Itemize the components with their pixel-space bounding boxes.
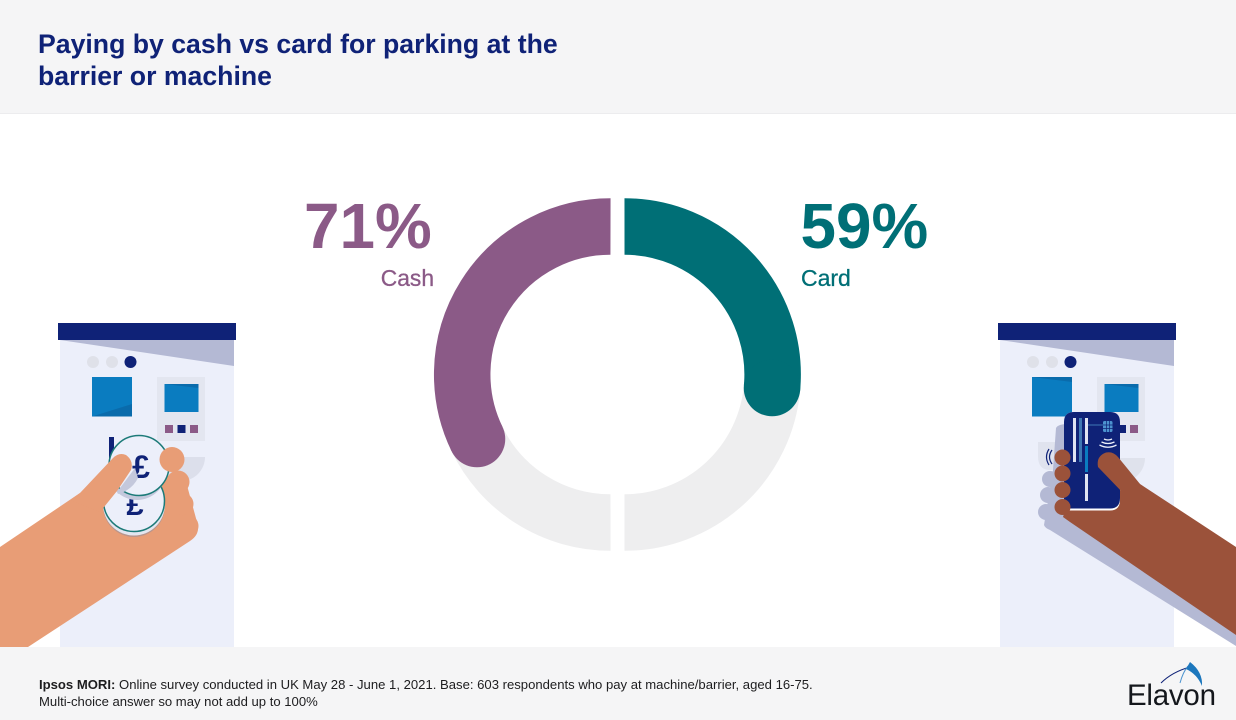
illustration: cash machine xyxy=(0,323,236,647)
label: cash: Cash xyxy=(381,265,434,291)
donut chart xyxy=(449,226,800,523)
chip xyxy=(1103,421,1112,432)
thumb xyxy=(70,454,132,512)
footnote xyxy=(39,677,813,709)
keypad panel xyxy=(1097,377,1145,441)
fingers xyxy=(1054,450,1070,515)
footnote: Multi-choice answer so may not add up to 100% xyxy=(39,694,318,709)
logo: Elavon xyxy=(1127,662,1216,712)
fingers xyxy=(160,447,198,538)
card reader slot xyxy=(1038,442,1145,482)
indicator lights xyxy=(1027,356,1076,368)
track: cash remainder xyxy=(477,439,610,523)
track: card remainder xyxy=(624,388,772,522)
arc: cash 71% xyxy=(449,226,610,467)
header band xyxy=(0,0,1236,114)
coin: upper pound: £ xyxy=(132,449,150,485)
footnote: Ipsos MORI: Online survey conducted in UK May 28 - June 1, 2021. Base: 603 respondents who pay at machine/barrier, aged 16-75. xyxy=(39,677,813,692)
label: card: Card xyxy=(801,265,851,291)
keypad panel xyxy=(157,377,205,441)
contactless symbol xyxy=(1100,439,1116,447)
footer band xyxy=(0,647,1236,720)
hand shadow xyxy=(1038,424,1236,646)
machine roof shadow xyxy=(60,340,234,366)
illustration: card machine xyxy=(998,323,1236,647)
hand palm xyxy=(1063,482,1236,635)
machine top bar xyxy=(58,323,236,340)
logo wordmark: Elavon xyxy=(1127,679,1216,712)
contactless waves xyxy=(1046,449,1052,465)
blue screen xyxy=(1032,377,1072,416)
stat: card 59%: 59% xyxy=(800,190,928,262)
thumb shadow xyxy=(117,468,138,494)
payment card xyxy=(1064,412,1120,510)
logo swoosh xyxy=(1161,662,1202,686)
machine body xyxy=(60,340,234,647)
coin slot xyxy=(109,437,205,481)
blue screen xyxy=(92,377,132,416)
stat: cash 71%: 71% xyxy=(304,190,432,262)
coin: upper pound xyxy=(108,436,169,500)
coin: lower pound xyxy=(103,470,165,537)
machine body xyxy=(1000,340,1174,647)
hand palm xyxy=(0,470,198,647)
coin: lower pound: £ xyxy=(126,487,144,522)
machine roof shadow xyxy=(1000,340,1174,366)
thumb xyxy=(1098,452,1140,494)
arc: card 59% xyxy=(624,226,800,416)
title xyxy=(38,29,558,91)
title: barrier or machine xyxy=(38,61,272,91)
title: Paying by cash vs card for parking at the xyxy=(38,29,558,59)
machine top bar xyxy=(998,323,1176,340)
indicator lights xyxy=(87,356,136,368)
